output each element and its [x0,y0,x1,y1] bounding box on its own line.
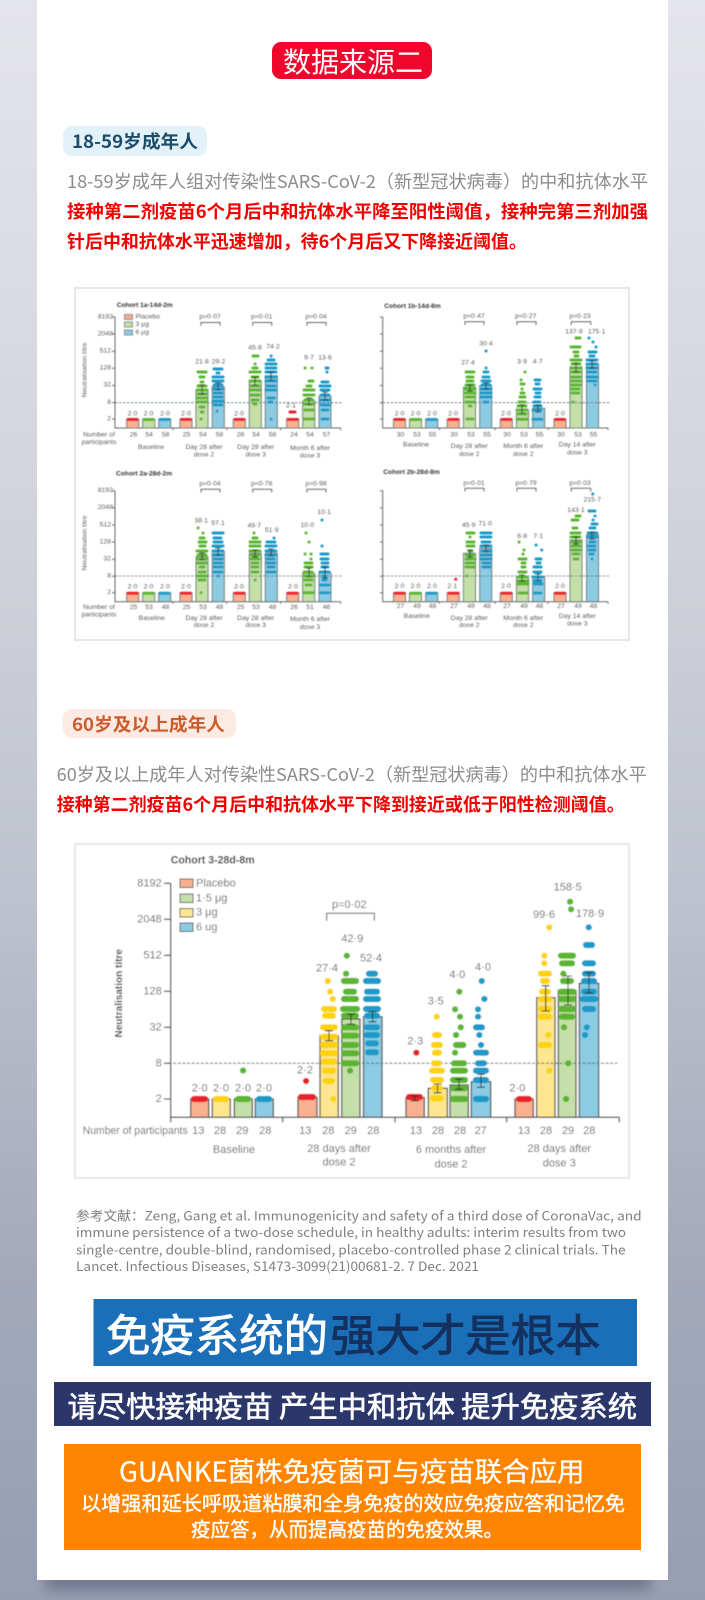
chart: cohort 2b: 2·0 [411,583,421,590]
value labels: 52·4 [360,952,382,964]
chart: cohort 1b: dose 2 [513,451,534,458]
chart: cohort 2a: 10·1 [317,509,331,516]
chart: cohort 1a: 2048 [98,330,113,338]
chart: cohort 2a: Number of [83,604,115,611]
value labels: 3·5 [428,996,444,1008]
chart: cohort 1a: dose 2 [194,452,214,458]
banner: vaccinate soon: 请尽快接种疫苗 产生中和抗体 提升免疫系统 [68,1384,637,1426]
group labels: 6 months after [416,1144,486,1156]
chart: cohort 1a: 24 [290,432,298,438]
participants row: 28 [583,1125,595,1137]
text block: 60+ description [57,761,647,817]
value labels: 4·0 [475,961,491,973]
value labels: 2·0 [235,1082,251,1094]
chart: cohort 2b: 27 [503,603,511,610]
participants row: Number of participants [83,1125,188,1137]
chart: cohort 2b: 27 [557,603,565,610]
chart: cohort 2a: 10·0 [300,522,314,529]
chart: cohort 1b: Day 28 after [451,443,489,450]
dots [194,1053,529,1099]
chart: cohort 2b: Baseline [404,613,430,620]
group labels: dose 2 [434,1158,468,1170]
p-value bracket [327,899,374,921]
chart: cohort 2b: dose 3 [567,620,588,628]
chart: cohort 1a: 54 [306,432,314,438]
chart: cohort 2b [380,469,610,629]
chart: cohort 2a: 128 [100,538,111,546]
chart: cohort 1b: 30 [397,432,404,438]
chart: cohort 2b: 48 [483,603,491,610]
chart: cohort 1a: 74·2 [266,344,280,350]
chart: cohort 1a: p=0·07 [199,314,221,320]
participants row: 13 [518,1125,530,1137]
banner: immune system headline: 强大才是根本 [330,1300,600,1364]
text block: 60+ description: 接种第二剂疫苗6个月后中和抗体水平下降到接近或低于阳性检测阈值。 [57,791,625,817]
chart: cohort 1a: 2 [107,416,111,422]
chart: cohort 2a: p=0·78 [251,480,273,488]
panel: GUANKE orange [64,1444,641,1550]
chart: cohort 2b: 2·0 [427,583,437,590]
chart: cohort 2b: 48 [536,603,543,610]
chart: cohort 1b: Month 6 after [503,443,544,450]
chart: cohort 1b: 2·0 [411,410,421,418]
chart: cohort 1a: p=0·01 [251,314,273,320]
panel: cohort 3 chart: Cohort 3-28d-8m [171,855,255,867]
value labels: 42·9 [341,933,363,945]
chart: cohort 2a: 512 [100,522,111,528]
participants row: 28 [540,1125,552,1137]
chart: cohort 2a: 53 [145,604,153,611]
chart: cohort 2a: 48 [216,604,223,611]
chart: cohort 2a: Day 28 after [185,615,223,622]
chart: cohort 2b: dose 2 [513,622,534,629]
chart: cohort 1b: 4·7 [533,358,543,366]
participants row: 28 [259,1125,271,1137]
value labels: 2·0 [192,1082,208,1094]
chart: cohort 1a: 8192 [98,314,113,320]
chart: cohort 2a: 2·0 [128,584,138,590]
value labels: 4·0 [449,969,465,981]
participants row: 28 [214,1125,226,1137]
chart: cohort 2a: Cohort 2a-28d-2m [116,470,172,478]
references: 参考文献：Zeng, Gang et al. Immunogenicity and safety of a third dose of CoronaVac, and [76,1206,642,1224]
chart: cohort 1a: Month 6 after [290,445,331,452]
chart: cohort 1b: Baseline [403,442,429,448]
chart: cohort 2a: dose 3 [245,622,266,629]
chart: cohort 1b: 53 [467,432,475,438]
value labels: 158·5 [554,881,582,893]
chart: cohort 1a: 54 [145,432,153,438]
y axis labels: 32 [149,1021,162,1033]
chart: cohort 1a: 58 [162,432,169,438]
panel: GUANKE orange: 疫应答，从而提高疫苗的免疫效果。 [191,1514,503,1542]
y axis labels: 8192 [137,877,162,889]
participants row: 29 [236,1125,248,1137]
chart: cohort 1b: 175·1 [588,328,606,336]
chart: cohort 1a: 32 [103,382,111,388]
chart: cohort 2a: dose 2 [194,622,214,629]
chart: cohort 1b: 2·0 [448,410,458,418]
chart: cohort 1a: 2·0 [128,410,138,418]
bars [191,983,599,1117]
chart: cohort 2a: dose 3 [300,624,320,631]
panel: cohort charts 18-59 [75,288,629,640]
tag: 60+ adults: 60岁及以上成年人 [72,711,225,737]
panel: GUANKE orange: GUANKE菌株免疫菌可与疫苗联合应用 [119,1450,584,1490]
references: Lancet. Infectious Diseases, S1473-3099(21)00681-2. 7 Dec. 2021 [76,1256,479,1275]
chart: cohort 1a: 57 [323,432,330,438]
chart: cohort 1a: 2·1 [286,402,296,410]
chart: cohort 2a: 2 [107,589,111,596]
chart: cohort 1b: 30·4 [479,340,493,348]
chart: cohort 2a: 25 [130,604,137,611]
value labels: 178·9 [576,908,604,920]
chart: cohort 1b: 55 [590,432,597,438]
chart: cohort 1a: Day 28 after [237,444,275,451]
group labels: 28 days after [528,1143,591,1155]
chart: cohort 2a: p=0·04 [199,480,221,488]
chart: cohort 1a: Baseline [138,444,164,451]
panel: cohort 3 chart: Neutralisation titre [114,949,125,1037]
chart: cohort 1b: dose 3 [567,450,588,456]
chart: cohort 1a: 2·0 [144,410,154,418]
chart: cohort 1a: Neutralisation titre [82,342,88,397]
chart: cohort 1b: Day 14 after [559,442,597,448]
chart: cohort 2b: 7·1 [533,533,543,540]
value labels: 2·2 [297,1065,313,1077]
chart: cohort 2b: 27 [450,603,458,610]
chart: cohort 1a: 26 [130,432,137,438]
chart: cohort 2a: 46 [323,604,330,611]
error bars [325,973,593,1101]
chart: cohort 2b: 49 [520,603,528,610]
chart: cohort 2b: 48 [429,603,436,610]
chart: cohort 1a: 54 [252,432,260,438]
chart: cohort 2a: participants [82,612,117,618]
chart: cohort 1a: Number of [83,432,115,438]
references: immune persistence of a two-dose schedule, in healthy adults: interim results from two [76,1222,626,1241]
chart: cohort 1b: 2·0 [427,410,437,418]
participants row: 28 [432,1125,444,1137]
chart: cohort 2a: 2·0 [144,584,154,590]
chart: cohort 2a: 53 [252,604,260,611]
chart: cohort 1b: 30 [503,432,511,438]
chart: cohort 1a: 45·8 [248,344,262,352]
chart: cohort 2b: 27 [397,603,404,610]
chart: cohort 2b: 49 [467,603,475,610]
chart: cohort 2b: 143·1 [567,507,585,514]
chart: cohort 2b: Cohort 2b-28d-8m [383,469,440,476]
group labels: Baseline [213,1144,255,1156]
p-value bracket: p=0·02 [332,899,367,911]
chart: cohort 1b: Cohort 1b-14d-8m [384,303,441,310]
chart: cohort 2b: 49 [574,603,582,610]
value labels: 99·6 [533,909,555,921]
chart: cohort 1b: 27·4 [461,360,475,366]
chart: cohort 2b: p=0·03 [569,480,591,487]
chart: cohort 1a: 25 [183,432,190,438]
y axis labels [137,877,162,1105]
group labels: 28 days after [307,1143,371,1155]
legend: 3 μg [196,907,218,919]
chart: cohort 1a: Placebo [136,314,160,320]
chart: cohort 1b: 137·9 [565,328,583,336]
participants row: 13 [299,1125,311,1137]
chart: cohort 2a: 25 [183,604,190,611]
chart: cohort 1a: 13·6 [318,354,332,362]
chart: cohort 2b: Day 14 after [559,613,597,620]
value labels: 2·0 [509,1082,525,1094]
chart: cohort 1a: dose 3 [300,452,320,460]
chart: cohort 1a: 2·0 [181,410,191,418]
chart: cohort 1b: 55 [536,432,543,438]
chart: cohort 1b: 30 [450,432,458,438]
threshold line [164,1062,617,1064]
chart: cohort 2a: 53 [199,604,207,611]
chart: cohort 1a: 54 [199,432,207,438]
participants row: 28 [367,1125,379,1137]
chart: cohort 2a: Month 6 after [290,616,331,623]
chart: cohort 2a: Day 28 after [237,615,275,622]
chart: cohort 2b: 2·0 [555,583,565,590]
chart: cohort 2a: Baseline [139,615,165,622]
text block: 60+ description: 60岁及以上成年人对传染性SARS-CoV-2（新型冠状病毒）的中和抗体水平 [57,761,647,787]
chart: cohort 1b: dose 2 [459,451,480,458]
chart: cohort 1a: 8 [107,399,111,406]
y axis labels: 128 [143,985,162,997]
chart: cohort 2a: 38·1 [194,518,208,524]
banner: immune system headline [94,1299,637,1366]
chart: cohort 2b: 215·7 [584,496,601,504]
text block: 18-59 description [67,168,648,254]
chart: cohort 1a: 58 [269,432,276,438]
chart: cohort 1b: 3·9 [517,358,527,366]
chart: cohort 2a: 2·0 [160,584,170,590]
chart: cohort 1a: 6 μg [136,329,149,336]
chart: cohort 1b: 2·0 [395,410,405,418]
y axis labels: 8 [156,1057,162,1069]
chart: cohort 1a: 26 [237,432,244,438]
group labels: dose 2 [322,1157,356,1169]
chart: cohort 2a: 26 [290,604,298,611]
chart: cohort 2b: 2·1 [447,583,457,590]
chart: cohort 2a [82,470,342,631]
chart: cohort 2b: 49 [413,603,421,610]
chart: cohort 1a: 9·7 [304,354,314,362]
value labels: 27·4 [316,962,338,974]
chart: cohort 1a: p=0·04 [305,314,327,320]
chart: cohort 1b: 2·0 [555,410,565,418]
chart: cohort 2a: 51 [306,604,314,611]
chart: cohort 2a: 2·0 [181,584,191,590]
chart: cohort 1a: 2·0 [234,410,244,418]
chart: cohort 2b: 45·9 [462,522,476,529]
chart: cohort 2a: 32 [103,556,111,562]
chart: cohort 2a: 2·0 [288,584,298,590]
chart: cohort 2a: Neutralisation titre [82,515,88,570]
panel: GUANKE orange: 以增强和延长呼吸道粘膜和全身免疫的效应免疫应答和记忆免 [81,1488,625,1516]
card shadow [46,1572,650,1590]
chart: cohort 1b: 53 [574,432,582,438]
y axis labels: 2 [156,1093,162,1105]
chart: cohort 2a: 49·7 [247,522,261,530]
tag: 18-59 adults: 18-59岁成年人 [72,128,198,154]
chart: cohort 1b: p=0·47 [463,313,485,320]
chart: cohort 1b: 55 [429,432,436,438]
chart: cohort 2a: 8192 [98,487,113,494]
chart: cohort 2b: 2·0 [395,583,405,590]
chart: cohort 2a: 2·0 [234,584,244,590]
chart: cohort 1b: 53 [413,432,421,438]
chart: cohort 2b: p=0·79 [515,480,537,487]
chart: cohort 1a: 21·8 [195,358,209,366]
references [76,1206,642,1275]
chart: cohort 1a: 128 [100,364,111,372]
chart: cohort 1a: 512 [100,348,111,354]
legend: 6 ug [196,921,217,933]
chart: cohort 1a: 3 μg [136,321,149,328]
chart: cohort 1a: 2·0 [160,410,170,418]
participants row: 27 [475,1125,487,1137]
chart: cohort 2b: Month 6 after [503,615,544,622]
chart: cohort 1b [380,303,610,458]
chart: cohort 2a: 25 [237,604,244,611]
chart: cohort 1a: Cohort 1a-14d-2m [117,302,173,309]
group labels: dose 3 [543,1157,576,1169]
value labels [192,881,604,1094]
title pill: 数据来源二 [283,41,423,81]
chart: cohort 1b: p=0·23 [569,313,591,320]
references: single-centre, double-blind, randomised, placebo-controlled phase 2 clinical trials. The [76,1240,626,1258]
chart: cohort 1b: 55 [483,432,491,438]
panel: cohort 3 chart [75,844,629,1178]
group labels [213,1143,591,1170]
chart: cohort 2b: dose 2 [459,622,480,629]
legend [180,877,236,933]
chart: cohort 2a: 8 [107,572,111,580]
chart: cohort 2a: p=0·98 [305,480,327,488]
chart: cohort 2a: 48 [162,604,169,611]
chart: cohort 2a: 2048 [98,504,113,511]
value labels: 2·0 [256,1082,272,1094]
chart: cohort 1b: 30 [557,432,565,438]
participants row: 29 [562,1125,574,1137]
chart: cohort 2b: 71·0 [478,520,492,528]
text block: 18-59 description: 接种第二剂疫苗6个月后中和抗体水平降至阳性阈值，接种完第三剂加强 [67,198,648,224]
chart: cohort 1b: 2·0 [501,410,511,418]
chart: cohort 2a: 57·1 [211,520,225,527]
value labels: 2·0 [213,1082,229,1094]
participants row: 13 [192,1125,204,1137]
chart: cohort 1a: dose 3 [245,452,266,458]
chart: cohort 2a: 48 [269,604,276,611]
chart: cohort 2b: 48 [590,603,597,610]
participants row [83,1125,595,1137]
chart: cohort 1a [82,302,343,460]
chart: cohort 1a: 58 [216,432,223,438]
participants row: 29 [345,1125,357,1137]
participants row: 13 [410,1125,422,1137]
text block: 18-59 description: 针后中和抗体水平迅速增加，待6个月后又下降接近阈值。 [67,228,527,254]
chart axes [164,883,619,1122]
chart: cohort 1b: 53 [520,432,528,438]
value labels: 2·3 [407,1036,423,1048]
chart: cohort 1a: Day 28 after [185,444,223,451]
legend: 1·5 μg [196,892,227,904]
chart: cohort 2b: Day 28 after [451,615,489,622]
chart: cohort 2a: 51·9 [265,527,279,534]
participants row: 28 [322,1125,334,1137]
chart: cohort 1b: p=0·27 [515,313,537,320]
chart: cohort 1a: participants [82,439,117,446]
chart: cohort 2b: p=0·01 [463,480,485,487]
banner: immune system headline: 免疫系统的 [106,1300,328,1364]
chart: cohort 2b: 2·0 [501,583,511,590]
y axis labels: 2048 [137,913,162,925]
participants row: 28 [454,1125,466,1137]
chart: cohort 2b: 6·8 [517,533,527,540]
y axis labels: 512 [143,949,162,961]
text block: 18-59 description: 18-59岁成年人组对传染性SARS-CoV-2（新型冠状病毒）的中和抗体水平 [67,168,648,194]
chart: cohort 1a: 29·2 [212,358,226,366]
legend: Placebo [196,877,236,889]
